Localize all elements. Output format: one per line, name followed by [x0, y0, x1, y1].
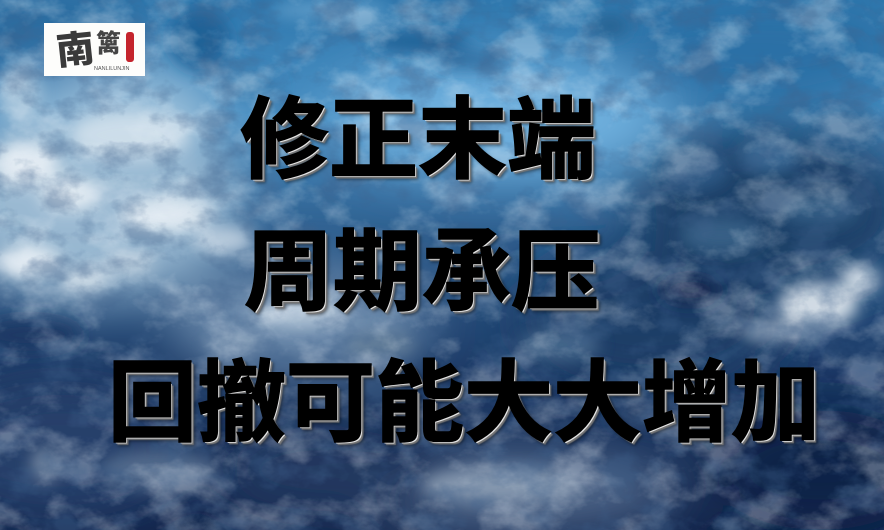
logo latin wordmark: NANLILUNJIN: [94, 66, 129, 72]
headline line 3: 回撤可能大大增加: [108, 353, 820, 453]
logo second character: 篱: [96, 24, 121, 60]
logo: brand badge: [44, 23, 145, 76]
headline line 1: 修正末端: [240, 90, 596, 190]
headline line 2: 周期承压: [244, 222, 600, 322]
logo red seal: [126, 32, 134, 62]
